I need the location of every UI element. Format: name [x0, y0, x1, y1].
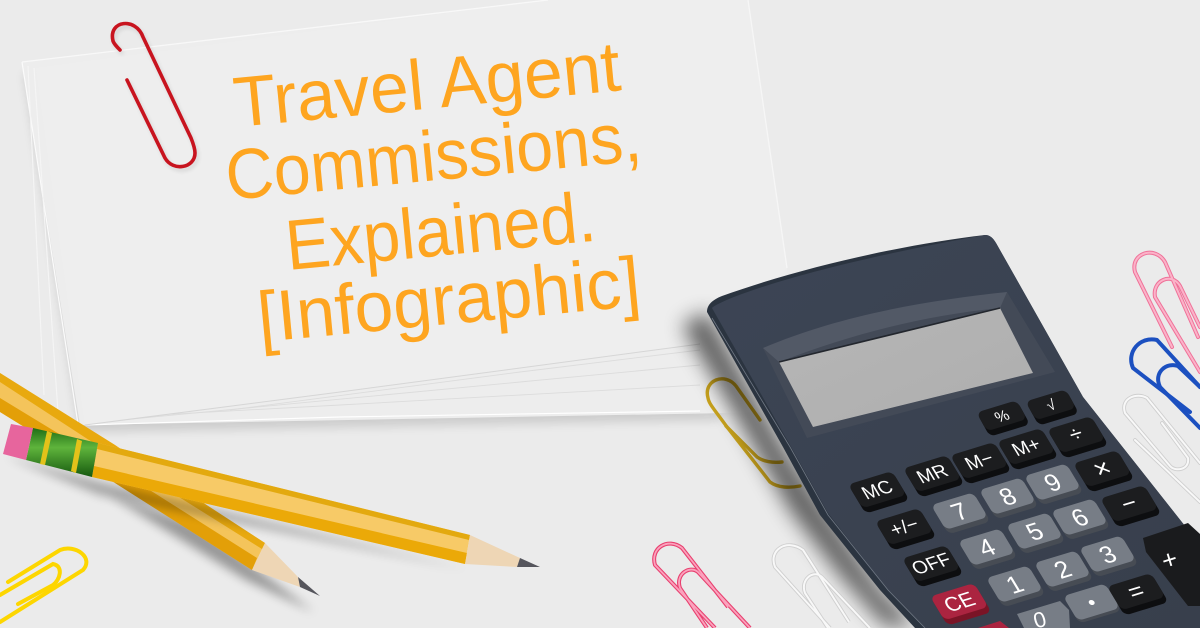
key: 3	[1079, 535, 1139, 577]
key: plus: +	[1158, 543, 1181, 576]
icon: pink paperclip right	[1134, 253, 1200, 372]
back pencil tip	[252, 543, 300, 587]
key: plus	[1143, 523, 1200, 606]
key: 7	[931, 492, 991, 534]
title: [Infographic]	[254, 243, 644, 358]
key: 6: 6	[1066, 504, 1094, 532]
icon: white paperclip bottom	[774, 545, 870, 628]
key: 9: 9	[1039, 469, 1067, 497]
key: multiply	[1072, 449, 1135, 493]
key: 1: 1	[1001, 571, 1029, 599]
key: OFF: OFF	[908, 550, 955, 579]
key: OFF	[902, 545, 964, 588]
key: square root: √	[1043, 397, 1060, 414]
key: percent	[976, 400, 1030, 437]
icon: pink paperclip bottom	[654, 544, 750, 628]
key: CE: CE	[939, 588, 980, 617]
key: 2	[1034, 550, 1094, 592]
key: 7: 7	[946, 498, 974, 526]
key: 4: 4	[973, 534, 1001, 562]
key: multiply: ×	[1087, 453, 1117, 484]
key: 6	[1051, 498, 1111, 540]
calculator body	[707, 235, 1200, 628]
icon: yellow paperclip bottom left	[0, 549, 86, 622]
icon: blue paperclip right	[1131, 339, 1200, 428]
key: square root	[1025, 389, 1079, 426]
key: 9	[1024, 463, 1084, 505]
key: equals	[1107, 573, 1169, 616]
key: decimal point: •	[1083, 592, 1101, 614]
title: Commissions,	[222, 98, 645, 216]
title	[222, 27, 645, 358]
key: CE	[930, 583, 992, 626]
key: red lower	[978, 621, 1009, 628]
icon: back pencil	[0, 373, 320, 612]
key: 5	[1006, 512, 1066, 554]
key: minus: −	[1116, 490, 1143, 518]
display bezel	[763, 292, 1055, 438]
title: Travel Agent	[230, 27, 624, 143]
key: equals: =	[1123, 578, 1150, 606]
display screen	[779, 308, 1033, 427]
top sheet	[36, 0, 787, 425]
key: 8	[979, 477, 1039, 519]
key: 3: 3	[1094, 541, 1122, 569]
key: MR	[903, 455, 965, 498]
key: minus	[1100, 485, 1162, 528]
key: M minus	[950, 442, 1012, 485]
pencil eraser	[3, 424, 33, 460]
front pencil tip	[465, 535, 520, 567]
key: 2: 2	[1049, 556, 1077, 584]
icon: dark yellow paperclip behind calculator	[707, 379, 800, 487]
title: Explained.	[282, 178, 599, 286]
key: 0	[1017, 601, 1070, 628]
key: M minus: M−	[961, 449, 998, 475]
key: percent: %	[992, 407, 1013, 426]
key: divide: ÷	[1063, 421, 1088, 447]
key: M plus	[997, 428, 1059, 471]
icon: front pencil	[3, 424, 540, 570]
panel: calculator	[707, 235, 1200, 628]
key: plus minus	[875, 508, 937, 551]
key: decimal point	[1063, 583, 1122, 624]
icon: red paperclip	[112, 24, 197, 170]
panel: stack of paper cards	[22, 0, 787, 432]
key: plus minus: +/−	[886, 514, 923, 541]
key: 5: 5	[1021, 518, 1049, 546]
pencil ferrule	[26, 428, 98, 477]
panel: calculator shadow	[682, 312, 915, 626]
icon: white paperclip right	[1124, 396, 1200, 502]
key: M plus: M+	[1008, 435, 1045, 461]
key: MR: MR	[913, 461, 952, 488]
key: divide	[1047, 416, 1109, 459]
key: MC: MC	[858, 477, 897, 504]
key: MC	[848, 471, 910, 514]
key: 1	[986, 565, 1046, 607]
key: 4	[958, 528, 1018, 570]
key: 8: 8	[994, 483, 1022, 511]
